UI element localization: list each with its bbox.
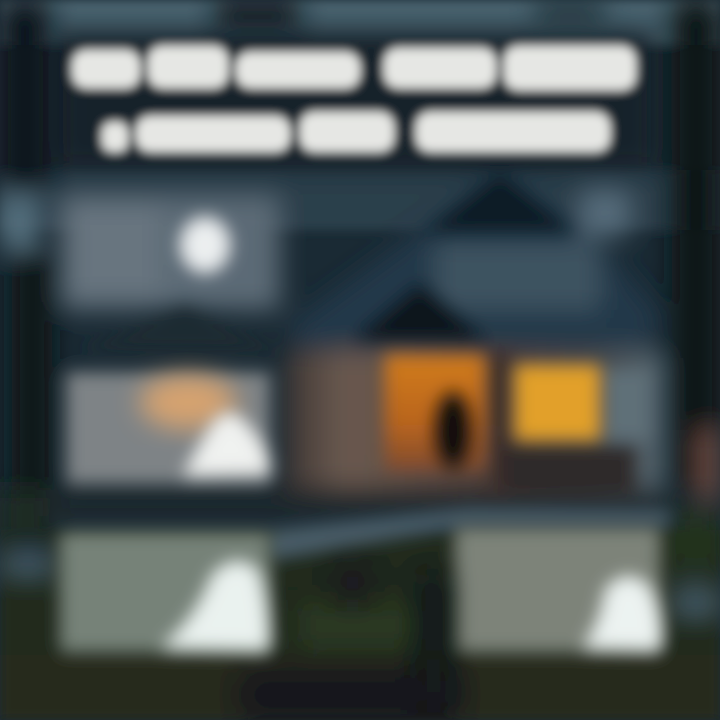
panel: lower right window [455, 527, 661, 652]
window glow [140, 375, 236, 429]
title backdrop: dark halo [55, 30, 655, 168]
icon: dark figure in door [435, 392, 471, 468]
panel: lower left window [60, 532, 270, 652]
title line 2 [102, 112, 610, 152]
house: dark gables [80, 172, 650, 495]
icon: roof ghost glow [180, 217, 230, 273]
porch rail [270, 508, 670, 560]
panel: glowing door [385, 355, 485, 470]
panel: upper left window [66, 372, 270, 484]
title line 1 [72, 46, 636, 90]
house: roof and walls [55, 178, 665, 516]
title: illegible blurred heading [72, 46, 636, 152]
icon: ghost [582, 576, 661, 650]
figure: central dark silhouette [335, 565, 448, 700]
panel: glowing right window [515, 365, 600, 440]
icon: ghost [160, 561, 268, 650]
icon: ghost [183, 413, 270, 476]
